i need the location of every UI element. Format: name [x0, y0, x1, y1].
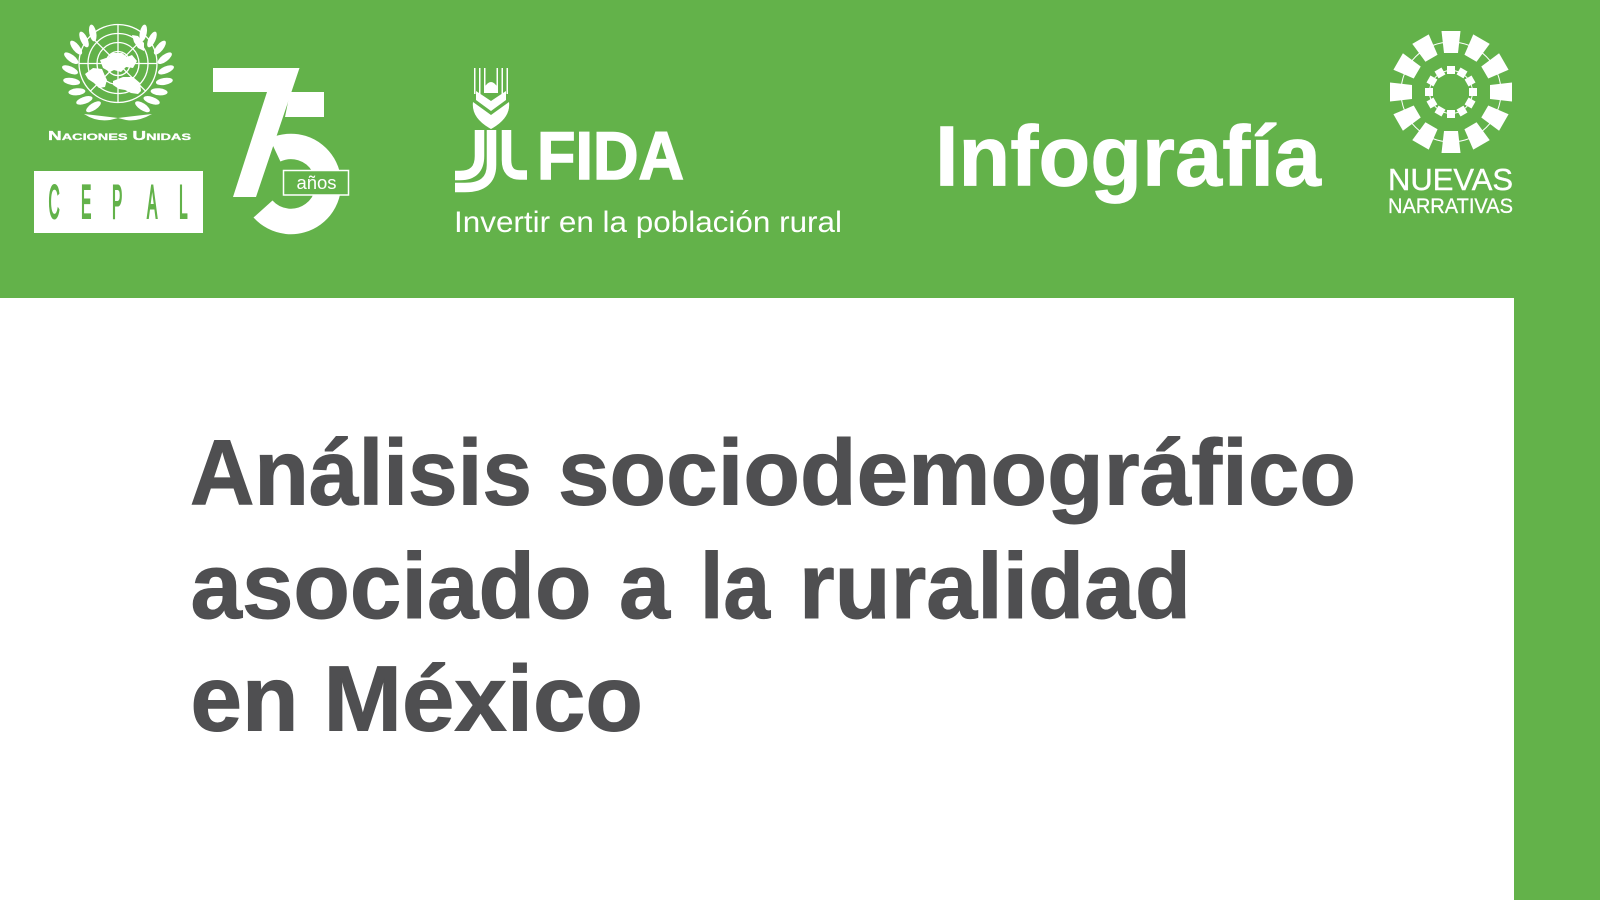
text: FIDA: FIDA: [537, 118, 684, 194]
main title: a: [619, 534, 671, 638]
logo: CEPAL: [34, 171, 203, 233]
logo: 75 años: años: [296, 172, 337, 193]
text: NUEVAS: NUEVAS: [1388, 162, 1513, 197]
logo: Nuevas Narrativas: [1388, 31, 1513, 218]
logo: CEPAL: P: [112, 176, 122, 229]
icon: United Nations emblem: [61, 24, 175, 120]
logo: 75 años: [213, 68, 348, 221]
icon: wheat ear: [473, 68, 509, 129]
main title: asociado: [190, 534, 592, 638]
panel: white title area: [0, 298, 1514, 900]
text: Naciones Unidas: N ACIONES U NIDAS: [48, 129, 191, 143]
text: tagline: Invertir en la población rural: [454, 206, 842, 239]
logo: CEPAL: L: [179, 176, 188, 229]
icon: JJL mark: [455, 130, 527, 188]
logo: CEPAL: C: [48, 176, 60, 229]
main title: México: [324, 646, 643, 750]
icon: ring of segments: [1390, 31, 1512, 153]
text: NARRATIVAS: NARRATIVAS: [1388, 195, 1513, 218]
logo: CEPAL: E: [81, 176, 91, 229]
logo: FIDA: [454, 68, 842, 239]
heading: Infografía: Infografía: [935, 110, 1322, 204]
main title: en: [190, 646, 298, 750]
main title: sociodemográfico: [558, 420, 1356, 524]
main title: la: [700, 534, 771, 638]
main title: ruralidad: [799, 534, 1191, 638]
main title: [190, 420, 1356, 750]
header band logos: [34, 24, 1513, 239]
logo: CEPAL: A: [147, 176, 158, 229]
main title: Análisis: [190, 420, 532, 524]
